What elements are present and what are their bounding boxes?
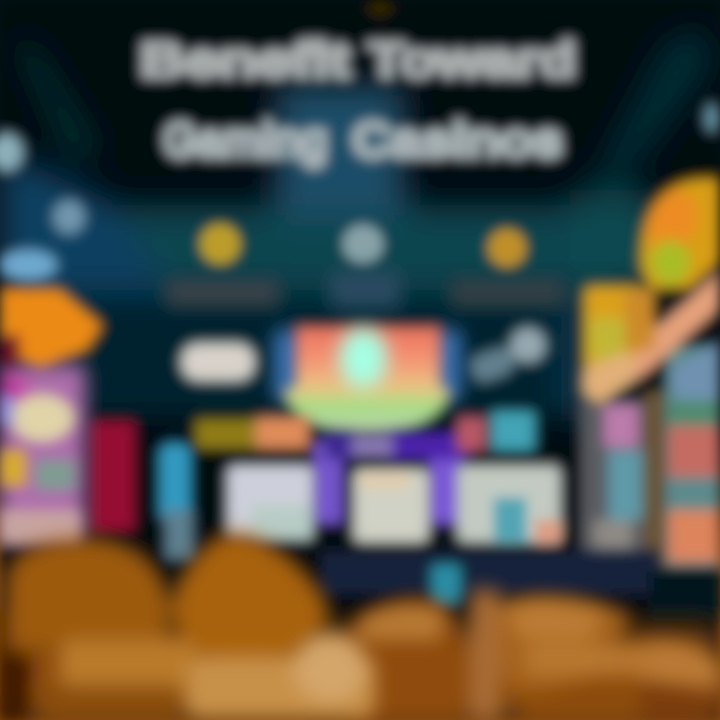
title: two blurred heading lines: Toward	[368, 32, 576, 88]
title: two blurred heading lines: Casinos	[352, 112, 563, 168]
panel: right slot machine with arch sign	[580, 177, 720, 580]
panel: three slot machine screens	[226, 464, 562, 544]
icon: gold coin	[199, 223, 241, 265]
panel: right grey chart marks	[466, 326, 547, 387]
seats: foreground amber chairs	[0, 532, 720, 720]
title: two blurred heading lines	[140, 32, 576, 168]
decor: small glowing ceiling lights	[0, 0, 720, 281]
panel: machine top banners	[194, 410, 536, 452]
icon: orange coin	[487, 228, 527, 268]
panel: central rainbow fan	[275, 326, 460, 432]
icon row: three badges	[199, 223, 527, 268]
panel: purple machine frames	[312, 432, 470, 525]
panel: left slot machine	[0, 288, 104, 544]
panel: floor glow and teal post	[320, 550, 720, 620]
panel: left white pill	[180, 342, 256, 382]
panel: blue and red machine columns	[90, 420, 194, 560]
captions: dim labels beneath icons	[165, 272, 565, 308]
icon: percent badge	[342, 224, 384, 264]
title: two blurred heading lines: Gaming	[163, 112, 328, 168]
title: two blurred heading lines: Benefit	[140, 32, 350, 88]
